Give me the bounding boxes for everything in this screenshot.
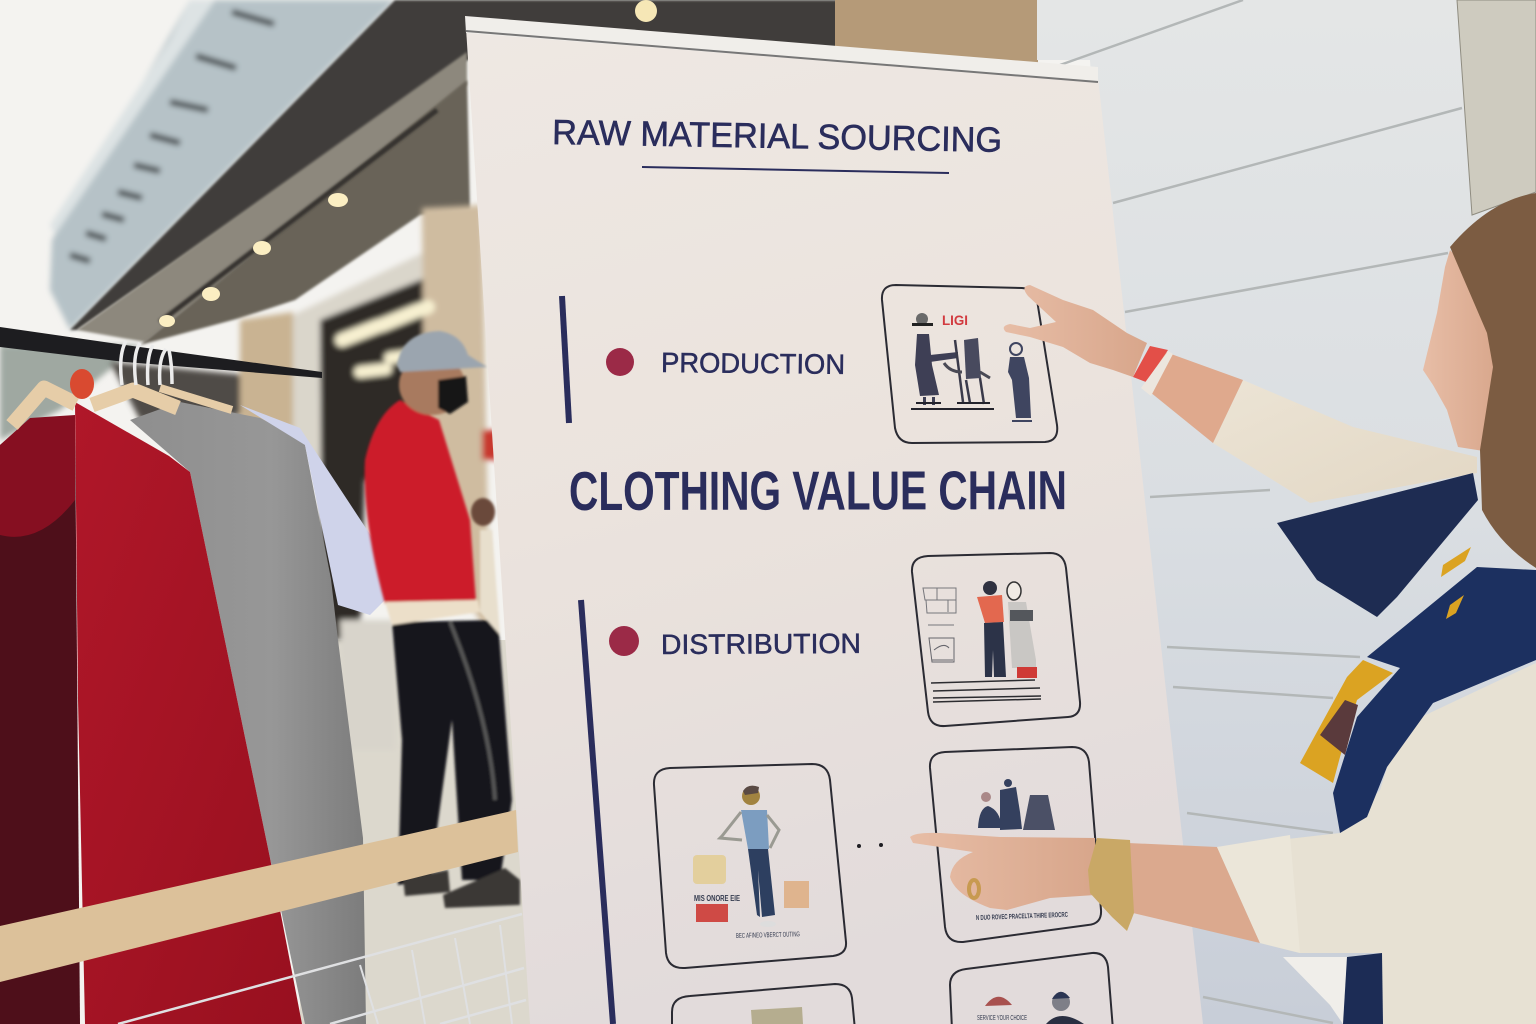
- background: light track: [160, 110, 437, 322]
- floorplan sketch: [929, 638, 954, 662]
- figure: left person: [912, 313, 958, 405]
- banner top rail: [465, 16, 1098, 82]
- person in red jacket, background: [365, 331, 520, 908]
- bullet: distribution: [609, 626, 639, 656]
- section bar: distribution: [581, 600, 613, 1024]
- forearm: [1150, 350, 1243, 443]
- figures: group: [978, 779, 1055, 830]
- cap: [397, 331, 487, 372]
- garment: lilac shirt: [240, 405, 402, 615]
- card: lower right: [950, 953, 1113, 1024]
- trousers: [392, 620, 512, 885]
- red stamp: LIGI: [942, 312, 968, 328]
- figure: standing man: [720, 786, 779, 927]
- white frill: [1283, 957, 1347, 1024]
- clothing rack: [0, 327, 402, 1024]
- scarf: yellow pattern: [1300, 660, 1393, 783]
- brick sketch: [923, 588, 956, 625]
- gold ring: [969, 880, 979, 898]
- background: grey trim strip: [77, 52, 467, 342]
- scarf: navy front: [1333, 567, 1536, 833]
- hair: [1450, 193, 1536, 568]
- background: ceiling lights: [159, 0, 657, 327]
- scarf: patterned inner: [1320, 700, 1358, 755]
- background: brick wall: [835, 0, 1038, 90]
- heading: raw material sourcing: RAW MATERIAL SOURCING: [552, 113, 1002, 160]
- figure: middle person: [944, 338, 990, 404]
- bullet: production: [606, 348, 634, 376]
- upper sleeve: [1213, 380, 1477, 503]
- floor lines: [931, 680, 1041, 702]
- gold bracelet: [1088, 838, 1134, 931]
- blouse cuff: [1217, 835, 1300, 953]
- badge: gold: [693, 855, 726, 884]
- garment: red dress: [75, 402, 302, 1024]
- mask: [438, 376, 468, 414]
- section bar: production: [562, 296, 569, 423]
- card: retail icon: [930, 747, 1101, 942]
- face: [1423, 250, 1500, 452]
- head: [399, 355, 465, 415]
- background: floor: [300, 640, 560, 1024]
- card: lower left: [672, 984, 855, 1024]
- banner stand: [465, 16, 1203, 1024]
- wall: stone column: [1457, 0, 1536, 215]
- wire basket: [118, 914, 526, 1024]
- upper hand: [1004, 285, 1147, 377]
- jacket hem: [385, 600, 480, 625]
- label: production: PRODUCTION: [661, 347, 845, 380]
- heading underline: [642, 167, 949, 173]
- garment: dark maroon: [0, 418, 80, 1024]
- wooden rail: [0, 810, 518, 982]
- rack pole: [0, 327, 322, 378]
- badge: beige: [784, 881, 809, 908]
- pointing hand: [910, 833, 1095, 910]
- connector dots: [857, 843, 883, 848]
- banner body: [466, 28, 1203, 1024]
- hand: [471, 498, 495, 526]
- badge: red arch: [985, 997, 1012, 1006]
- background: left wall below sky: [0, 345, 140, 440]
- background: dark fascia band: [70, 0, 840, 330]
- label: distribution: DISTRIBUTION: [661, 628, 861, 660]
- hanger hooks: [121, 341, 172, 385]
- figure: worker in orange: [977, 581, 1006, 677]
- wristband: white: [1141, 351, 1173, 396]
- scarf: navy fringe: [1277, 473, 1478, 617]
- badge: red label: [696, 904, 728, 922]
- hanger knob: [70, 369, 94, 399]
- background: building facade: [50, 0, 395, 330]
- lower forearm: [1128, 843, 1260, 943]
- caption: card footer: BEC AFINEO VBERCT OUTING: [736, 931, 800, 940]
- card: distribution icon: [912, 553, 1080, 726]
- card: customer icon: [654, 764, 846, 968]
- card: production icon: [882, 285, 1057, 443]
- caption: small print: MIS ONORE EIE: [694, 894, 740, 903]
- figure: helmeted person: [1046, 992, 1084, 1024]
- garment: grey shirt: [130, 402, 366, 1024]
- background: storefront: [110, 205, 500, 750]
- ground lines: [911, 403, 994, 409]
- scarf: yellow accents: [1441, 547, 1471, 619]
- background: ceiling soffit: [140, 80, 470, 345]
- torso: [365, 400, 476, 604]
- hangers: [12, 388, 232, 425]
- shoes: [403, 870, 450, 896]
- torso: cream blouse: [1217, 663, 1536, 1024]
- right strip: [480, 530, 500, 635]
- figure: right person: [1008, 343, 1032, 422]
- caption: small print: SERVICE YOUR CHOICE: [977, 1015, 1027, 1022]
- woman, right: [910, 193, 1536, 1024]
- caption: card footer: N DUO ROVEC PRACELTA THIRE EROCRC: [976, 912, 1068, 922]
- title: clothing value chain: CLOTHING VALUE CHAIN: [569, 459, 1067, 522]
- figure: worker in grey: [1007, 582, 1037, 678]
- garment: maroon collar: [0, 415, 75, 537]
- scarf: lower tail: [1343, 953, 1383, 1024]
- badge: olive: [751, 1007, 803, 1024]
- trouser stripe: [450, 622, 495, 800]
- wristband: red: [1133, 346, 1168, 382]
- wall: white siding: [1037, 0, 1536, 1024]
